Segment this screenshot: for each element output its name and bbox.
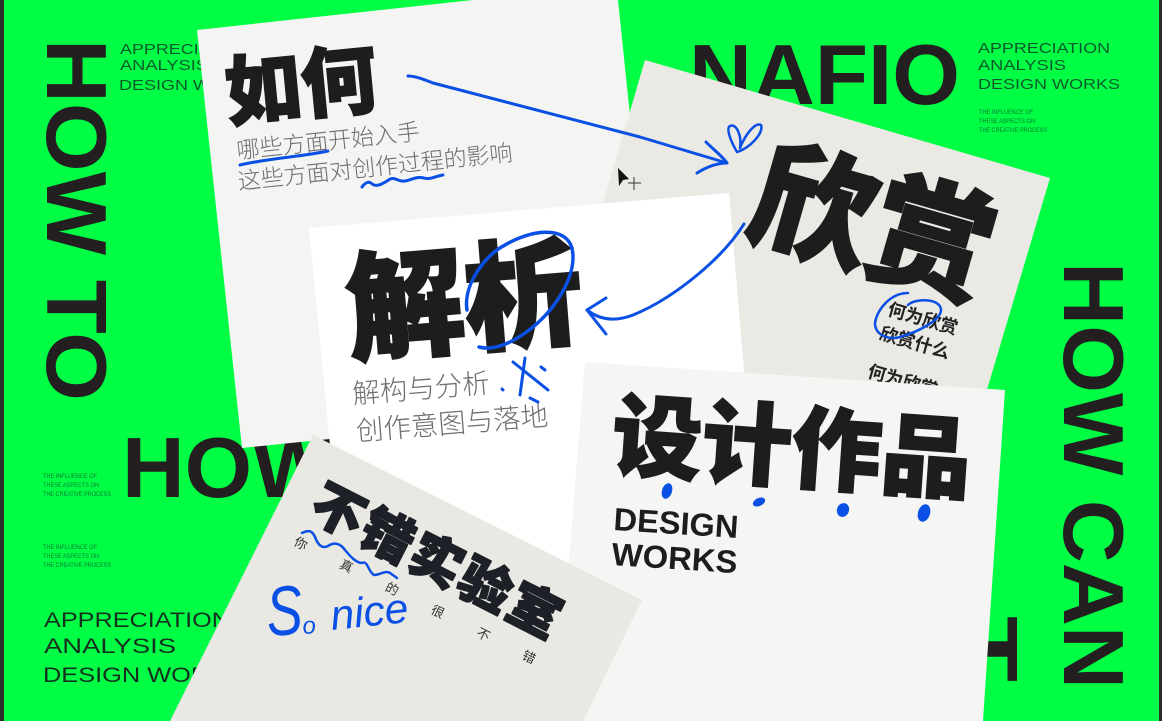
rotated letter T partly hidden: T [939,616,1034,682]
handwritten note: So nice [264,571,411,651]
text block: bottom left list: ANALYSIS [44,635,176,658]
small caption: left lower: THESE ASPECTS ON [43,554,99,560]
text block: top left list: ANALYSIS [120,57,208,74]
panel: nice lab card [170,435,642,721]
small caption: top right: THE INFLUENCE OF [979,110,1033,116]
frame edge: left [0,0,4,721]
text block: bottom left list: APPRECIATION [44,609,230,632]
heading: design works chinese: 设计作品 [609,388,975,512]
heading: appreciation: 欣赏 [735,127,1009,326]
subtext: appreciation: 何为欣赏 [865,360,940,400]
small caption: left upper [43,474,111,498]
annotation: squiggle under creative process [362,175,443,187]
subtext: appreciation: 何为欣赏 [885,298,960,338]
text block: bottom left list [43,609,243,687]
icon: mouse cursor with move handle [618,168,641,190]
handwritten note: So nice: S [264,571,305,651]
small caption: left lower: THE INFLUENCE OF [43,545,97,551]
small caption: top right: THE CREATIVE PROCESS [979,128,1047,134]
icon: hand drawn heart [728,125,761,152]
heading: HOW partly hidden: HOW [122,421,335,516]
small caption: left upper: THE INFLUENCE OF [43,474,97,480]
text block: top left list [119,41,261,94]
panel: analysis card [309,193,760,600]
spaced caption: nice lab: 你真的很不错 [292,534,572,684]
text block: bottom left list: DESIGN WORKS [43,664,243,687]
subtext: how: 这些方面对创作过程的影响 [237,140,514,194]
annotation: sparkle marks [502,358,548,402]
annotation: wavy line on nice lab card [302,531,397,578]
heading: NAFIO: NAFIO [689,28,960,123]
subtext: appreciation: 欣赏什么 [877,322,952,362]
annotation: underline under first line [240,151,328,165]
annotation: blue drops under design works [660,482,932,523]
annotation: loop around appreciation subtext [875,293,941,338]
subheading: design works english: DESIGN [613,501,740,545]
panel: design works card [556,362,1005,721]
vertical heading: HOW CAN: HOW CAN [1045,262,1140,689]
panel: how card [197,0,660,448]
arrow: from appreciation card to analysis card [587,224,744,334]
subtext: how: 哪些方面开始入手 [235,118,421,164]
small caption: left lower [43,545,111,569]
text block: top right list: ANALYSIS [978,57,1066,74]
text block: top right list: APPRECIATION [978,40,1110,57]
subheading: design works english [611,501,740,580]
annotation: circle around analysis character [467,232,573,348]
text block: top right list: DESIGN WORKS [978,76,1120,93]
text block: top left list: APPRECIATION [120,41,252,58]
subtext: analysis [351,368,549,447]
heading: nice lab: 不错实验室 [301,474,573,651]
arrow: from how card to appreciation card [408,76,727,173]
small caption: left lower: THE CREATIVE PROCESS [43,563,111,569]
subtext: analysis: 创作意图与落地 [355,400,549,447]
subtext: analysis: 解构与分析 [351,368,491,409]
vertical heading: HOW TO: HOW TO [28,39,123,401]
panel: appreciation card [585,60,1050,430]
small caption: left upper: THESE ASPECTS ON [43,483,99,489]
small caption: top right: THESE ASPECTS ON [979,119,1035,125]
subheading: design works english: WORKS [611,536,739,580]
handwritten note: So nice: o [302,612,317,640]
heading: analysis: 解析 [341,228,587,378]
small caption: left upper: THE CREATIVE PROCESS [43,492,111,498]
handwritten note: So nice: nice [328,584,411,639]
small caption: top right [979,110,1047,134]
text block: top left list: DESIGN WORKS [119,77,261,94]
text block: top right list [978,40,1120,93]
subtext: appreciation [865,298,960,400]
heading: how: 如何 [222,38,381,137]
frame edge: right [1159,0,1162,721]
